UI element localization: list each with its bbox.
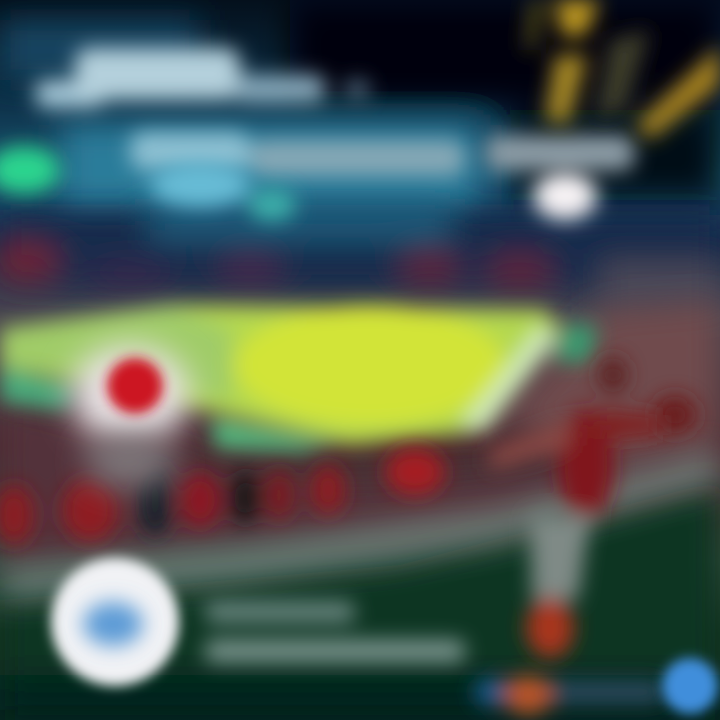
japan flag: [70, 345, 190, 488]
green badge: [0, 146, 296, 221]
player: [490, 357, 660, 658]
title text block: [35, 48, 635, 176]
night sky: [0, 0, 720, 210]
logo blue mark: [83, 602, 143, 646]
player head: [599, 357, 627, 393]
white glow: [533, 172, 597, 220]
title line one: [35, 48, 369, 108]
gold light beams: [525, 0, 720, 140]
player torso: [558, 409, 614, 521]
footer pill: [474, 675, 665, 715]
football pitch: [0, 305, 598, 452]
player legs: [530, 515, 590, 600]
crowd figures: [0, 395, 697, 545]
title line two: [130, 132, 635, 176]
crowd foreground: [0, 300, 720, 570]
blue circle button: [662, 658, 718, 714]
caption text block: [205, 602, 465, 662]
stadium stands: [0, 205, 720, 312]
player socks: [526, 598, 574, 658]
player arm: [600, 410, 660, 440]
grey banner stripe: [0, 450, 720, 598]
bottom field panel: [0, 480, 720, 720]
logo circle: [51, 558, 179, 686]
